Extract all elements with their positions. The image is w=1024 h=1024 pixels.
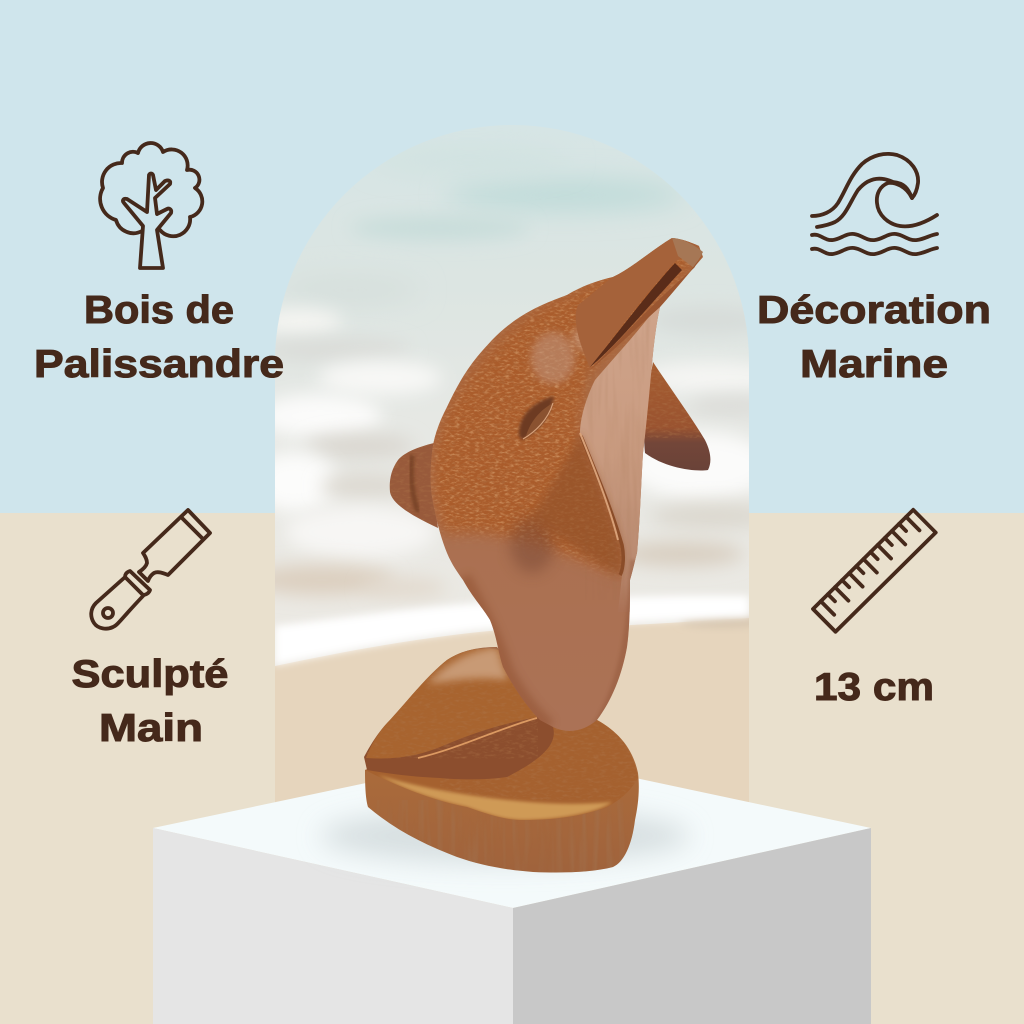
eye bbox=[519, 396, 554, 440]
mouth line bbox=[590, 263, 682, 367]
label: Décoration Marine: Marine bbox=[800, 343, 948, 386]
label: Décoration Marine: Décoration bbox=[757, 289, 991, 332]
label: Sculpté Main: Main bbox=[99, 707, 203, 750]
label: Bois de Palissandre: Palissandre bbox=[34, 343, 284, 386]
beak tip bbox=[672, 238, 703, 268]
belly light area bbox=[580, 307, 660, 612]
pedestal bbox=[153, 752, 871, 1024]
back colour with soft lower edge bbox=[430, 238, 700, 576]
beak top plane bbox=[576, 238, 699, 368]
dark side patch bbox=[510, 517, 554, 573]
label: Bois de Palissandre bbox=[34, 289, 284, 386]
left top feature: wood bbox=[34, 143, 284, 386]
pedestal top face bbox=[153, 752, 871, 908]
icon: tree bbox=[100, 143, 202, 268]
background: sand lower band bbox=[0, 513, 1024, 1024]
right bottom feature: size bbox=[813, 510, 936, 709]
pedestal right face bbox=[513, 828, 871, 1024]
left bottom feature: hand carved bbox=[72, 510, 228, 750]
dolphin body bbox=[425, 235, 710, 731]
base top light rim bbox=[378, 775, 612, 820]
front flipper bbox=[640, 360, 712, 470]
pedestal soft shadow bbox=[320, 808, 690, 864]
icon: chisel bbox=[91, 510, 210, 629]
right top feature: marine bbox=[757, 154, 991, 386]
foam line bbox=[275, 596, 749, 665]
icon: ruler bbox=[813, 510, 936, 632]
wooden dolphin sculpture bbox=[360, 235, 712, 875]
rear flipper bbox=[388, 440, 438, 530]
label: Décoration Marine bbox=[757, 289, 991, 386]
background: sky blue upper band bbox=[0, 0, 1024, 513]
label: 13 cm: 13 cm bbox=[814, 666, 934, 709]
label: Bois de Palissandre: Bois de bbox=[84, 289, 234, 332]
label: Sculpté Main bbox=[72, 653, 228, 750]
tail fluke bbox=[364, 647, 554, 779]
head highlight bbox=[531, 332, 575, 384]
label: Sculpté Main: Sculpté bbox=[72, 653, 228, 696]
lower body shading along the edge bbox=[462, 578, 548, 728]
lower jaw bbox=[590, 254, 703, 370]
wet sand beach bbox=[275, 618, 749, 815]
base block bbox=[360, 715, 645, 875]
pectoral fin bbox=[530, 433, 623, 575]
pedestal left face bbox=[153, 828, 513, 1024]
arch photo: blurred sea and beach bbox=[275, 129, 749, 802]
icon: wave bbox=[812, 154, 937, 254]
